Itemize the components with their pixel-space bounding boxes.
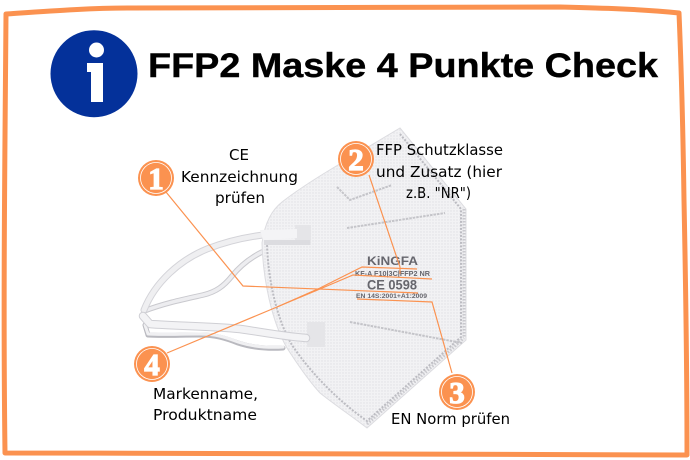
mask fold lines (337, 185, 462, 343)
mask print: KINGFA text: KF-A F10|3C|FFP2 NR (355, 271, 430, 278)
label 2: FFP Schutzklasse: z.B. "NR") (406, 184, 471, 202)
mask body (260, 128, 466, 428)
strap welds (295, 225, 311, 245)
label 1: CE Kennzeichnung: Kennzeichnung (181, 168, 298, 186)
front strap (143, 316, 306, 338)
mask print: KINGFA text (355, 254, 430, 300)
label 2: FFP Schutzklasse: FFP Schutzklasse (376, 141, 503, 159)
label 2: FFP Schutzklasse: und Zusatz (hier (376, 163, 503, 181)
marker 3: 3 (449, 375, 465, 410)
label 3: EN Norm: EN Norm prüfen (391, 410, 510, 428)
marker 2 (338, 141, 374, 177)
label 1: CE Kennzeichnung: CE (229, 146, 249, 164)
title: FFP2 Maske 4 Punkte Check (148, 47, 658, 85)
marker 1: 1 (148, 161, 164, 196)
marker 4: 4 (144, 347, 160, 382)
marker 1 (138, 160, 174, 196)
mask print: KINGFA text: EN 14S:2001+A1:2009 (356, 293, 427, 300)
marker 2: 2 (348, 142, 364, 177)
marker 3 (439, 374, 475, 410)
label 4: Markenname: Produktname (153, 406, 257, 424)
marker 4 (134, 346, 170, 382)
label 1: CE Kennzeichnung (181, 146, 298, 207)
mask straps (144, 233, 297, 348)
mask print: KINGFA text: KiNGFA (367, 254, 418, 268)
label 2: FFP Schutzklasse (376, 141, 503, 202)
mask print: KINGFA text: CE 0598 (367, 276, 417, 292)
label 4: Markenname (153, 385, 258, 424)
leader lines (166, 175, 452, 373)
icon: info circle (50, 30, 138, 117)
label 4: Markenname: Markenname, (153, 385, 258, 403)
label 1: CE Kennzeichnung: prüfen (215, 189, 265, 207)
